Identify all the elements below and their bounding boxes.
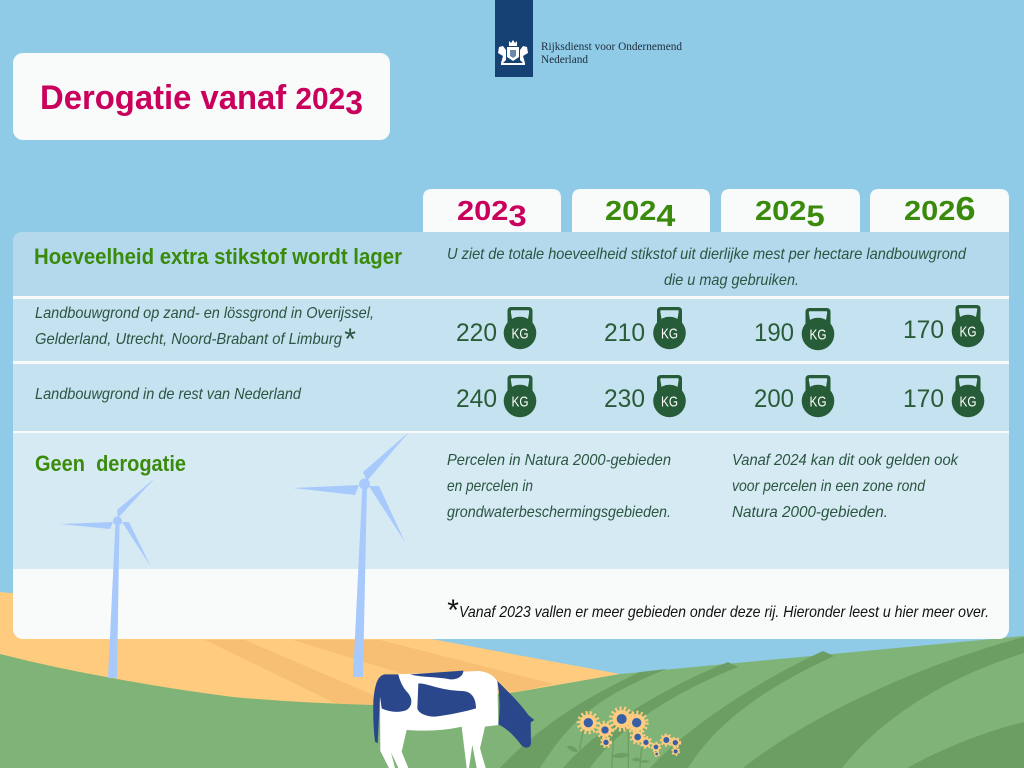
text block: uitleg: die u mag gebruiken. [664,272,799,289]
footnote: * [446,594,459,627]
footnote [446,594,989,627]
text block: percelen Natura 2000: en percelen in [447,478,533,495]
text block: percelen Natura 2000 [447,452,671,521]
text block: vanaf 2024: Vanaf 2024 kan dit ook gelden ook [732,452,959,469]
title card [13,53,390,140]
logo: Rijksoverheid: Nederland [541,54,588,66]
values row 1: KG [512,326,528,342]
values row 2: 170 [903,385,944,413]
heading: hoeveelheid: Hoeveelheid extra stikstof wordt lager [34,244,402,269]
illustration: cow [373,671,534,768]
year tabs: 4 [656,198,675,233]
text block: percelen Natura 2000: Percelen in Natura 2000-gebieden [447,452,671,469]
values row 1: 190 [754,319,794,347]
values row 2 [456,375,984,417]
logo: Rijksoverheid [495,0,682,77]
values row 2: KG [512,394,528,410]
title card: 3 [345,84,363,121]
heading: geen derogatie: Geen derogatie [35,451,186,476]
landscape: green hills [0,636,1024,768]
values row 1 [456,305,984,350]
icon: wind turbine left [60,478,155,678]
row label: zand- en lössgrond: Landbouwgrond op zand- en lössgrond in Overijssel, [35,305,374,322]
values row 1: KG [810,326,826,344]
text block: uitleg: U ziet de totale hoeveelheid stikstof uit dierlijke mest per hectare landbouwgrond [447,246,967,263]
values row 2: 240 [456,385,497,413]
year tabs: 3 [508,198,527,233]
row label: zand- en lössgrond: * [343,323,356,356]
row label: rest van Nederland: Landbouwgrond in de rest van Nederland [35,386,302,403]
year tabs: 2026 [904,191,976,228]
values row 2: 200 [754,385,794,413]
values row 1: 220 [456,319,497,347]
row label: zand- en lössgrond: Gelderland, Utrecht, Noord-Brabant of Limburg [35,331,342,348]
text block: vanaf 2024: voor percelen in een zone rond [732,478,926,495]
values row 2: KG [661,394,678,410]
text block: vanaf 2024 [732,452,959,521]
row label: zand- en lössgrond [35,305,374,356]
values row 1: KG [960,324,976,340]
title card: Derogatie vanaf 202 [40,79,347,117]
year tabs: 202 [755,195,806,227]
values row 2: 230 [604,385,645,413]
text block: vanaf 2024: Natura 2000-gebieden. [732,504,888,521]
year tabs: 202 [605,195,656,227]
values row 1: KG [661,326,678,342]
icon: wind turbine right [293,432,409,677]
panel: main table [13,232,1009,639]
text block: percelen Natura 2000: grondwaterbeschermingsgebieden. [447,504,671,521]
values row 1: 210 [604,319,645,347]
year tabs: 5 [806,198,825,233]
illustration: sunflowers [567,710,680,768]
landscape: sand field [0,592,620,768]
values row 2: KG [810,394,826,410]
values row 2: KG [960,394,976,410]
year tabs: 202 [457,195,508,227]
text block: uitleg [447,246,967,289]
values row 1: 170 [903,316,944,344]
year tabs [423,189,1009,233]
logo: Rijksoverheid: Rijksdienst voor Ondernemend [541,41,682,53]
